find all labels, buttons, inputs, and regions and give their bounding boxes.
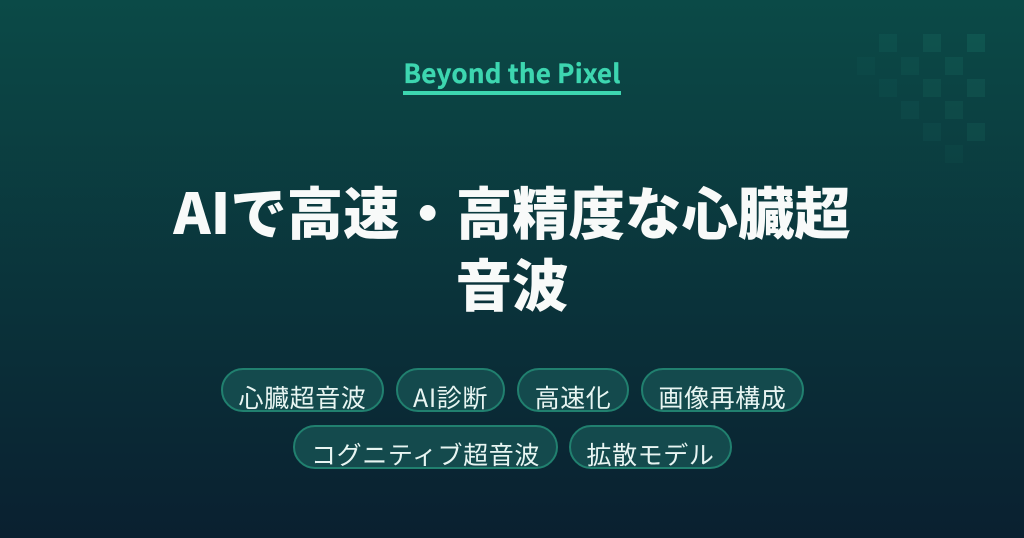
title: AIで高速・高精度な心臓超 [173,170,851,251]
title [172,170,851,323]
tag: コグニティブ超音波 [293,425,558,469]
tag: AI診断: AI診断 [413,379,488,415]
tag: 画像再構成: 画像再構成 [658,379,786,415]
tag: 拡散モデル: 拡散モデル [586,436,714,472]
eyebrow label: Beyond the Pixel: Beyond the Pixel [403,54,621,91]
tag: 高速化: 高速化 [535,379,611,415]
tag: コグニティブ超音波: コグニティブ超音波 [311,436,540,472]
tag: 心臓超音波 [221,368,384,412]
tag: 心臓超音波: 心臓超音波 [238,379,366,415]
tag: 高速化 [517,368,629,412]
tag: 画像再構成 [641,368,804,412]
tag: 拡散モデル [569,425,732,469]
title: 音波 [456,242,568,323]
decorative pixel grid icon [923,34,985,141]
tag: AI診断 [396,368,505,412]
